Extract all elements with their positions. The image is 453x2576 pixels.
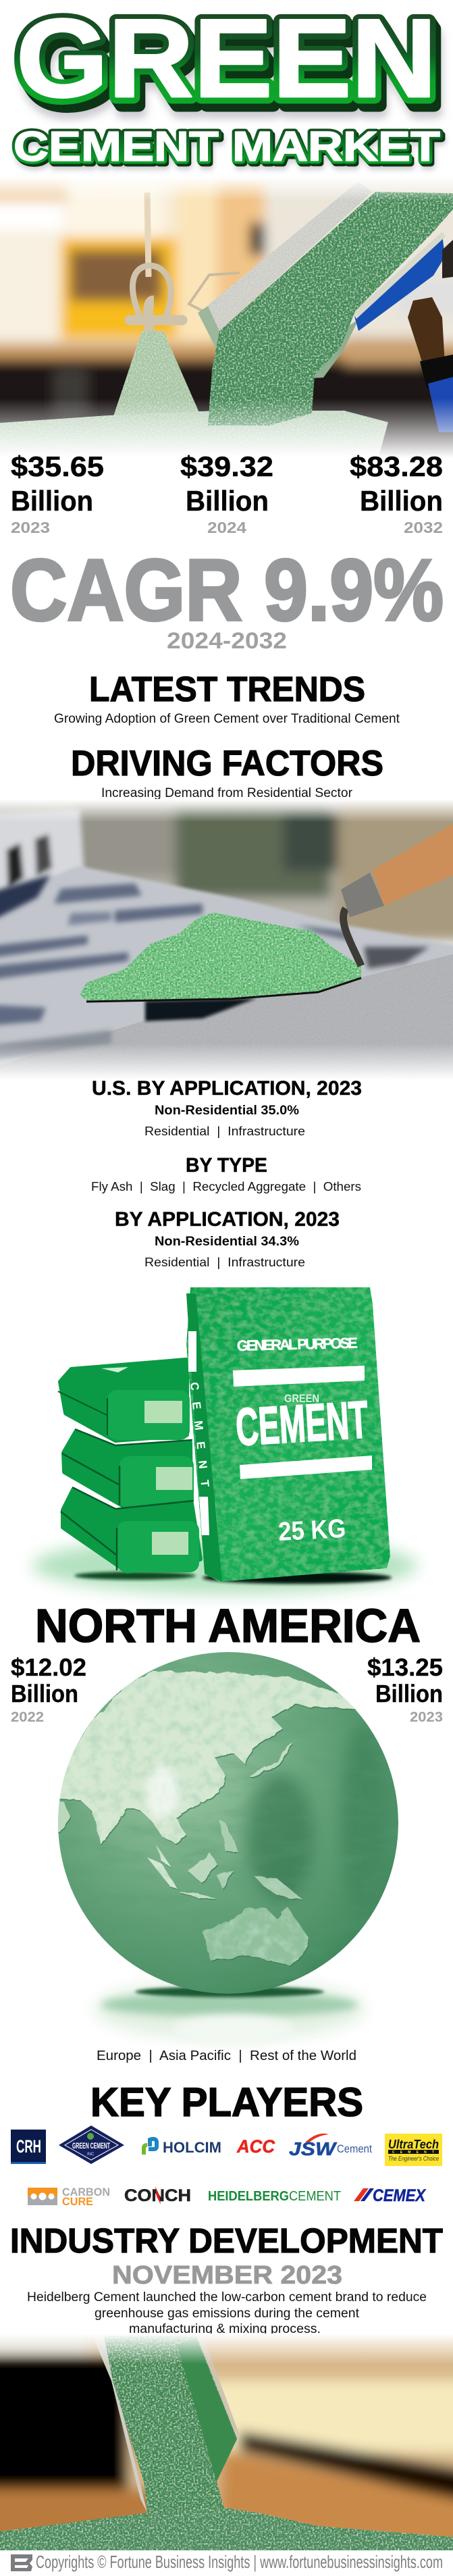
concrete bowl rim [0, 411, 388, 459]
title line: CEMENT MARKET: CEMENT MARKET [14, 124, 440, 170]
segment: U.S. by application: U.S. BY APPLICATION, 2023 [92, 1077, 362, 1100]
left concrete block [0, 808, 86, 892]
stacked bag: bottom [61, 1487, 200, 1572]
top white fade [0, 2334, 453, 2364]
logo: Green Cement Inc: INC [87, 2153, 95, 2157]
logo: Green Cement Inc [59, 2126, 124, 2164]
stat 2023: Billion [11, 485, 93, 517]
latest trends text: Growing Adoption of Green Cement over Traditional Cement [54, 712, 400, 726]
stat 2023: 2023 [11, 519, 50, 536]
stacked bag: top [58, 1360, 190, 1440]
tall bag label: 25 KG [277, 1514, 346, 1547]
stat 2032: 2032 [404, 519, 443, 536]
stat 2024 [180, 450, 273, 536]
driving factors text: Increasing Demand from Residential Sector [101, 786, 353, 800]
logo: Cemex [354, 2186, 426, 2205]
segment: U.S. by application [92, 1077, 362, 1138]
ground shadow [32, 1537, 417, 1594]
stacked bag: middle [62, 1429, 194, 1509]
logo: UltraTech: UltraTech [388, 2138, 439, 2151]
icon: Fortune Business Insights logo [11, 2554, 32, 2571]
key players heading: KEY PLAYERS [90, 2080, 363, 2125]
blurred yellow machine background [0, 178, 453, 456]
segment: by type: BY TYPE [186, 1154, 267, 1177]
stat 2023: $35.65 [11, 450, 104, 482]
segment: U.S. by application: Non-Residential 35.0% [155, 1104, 299, 1118]
north america 2022 value: $12.02 [11, 1653, 86, 1681]
shadow under trowel [145, 998, 257, 1021]
stat 2024: Billion [186, 485, 269, 517]
segment: by application [115, 1208, 340, 1269]
north america 2023 value: $13.25 [367, 1653, 443, 1681]
stat 2032 [350, 450, 443, 536]
mid photo: green cement on trowel over concrete block [0, 787, 453, 1087]
logo: JSW Cement [289, 2134, 372, 2159]
development description: greenhouse gas emissions during the cement [95, 2307, 360, 2321]
chute end plates [198, 306, 219, 350]
logo: Conch: CONCH [124, 2186, 191, 2205]
logo: CarbonCure: CARBON [62, 2186, 110, 2198]
tall bag label [233, 1335, 372, 1547]
chute white rim [208, 182, 373, 331]
logo: ACC: ACC [236, 2136, 275, 2157]
white fade edges [0, 799, 453, 822]
CAGR period: 2024-2032 [167, 628, 287, 654]
tall bag side strip [186, 1293, 222, 1582]
trowel [86, 824, 453, 1002]
title line: GREEN: GREEN [16, 0, 437, 121]
logo: CRH [11, 2130, 46, 2164]
north america 2022 value: 2022 [11, 1709, 44, 1725]
continents [54, 1672, 358, 1966]
globe sphere [54, 1652, 400, 1994]
logo: HeidelbergCement [208, 2189, 341, 2204]
illustration: green cement bags [32, 1287, 417, 1594]
segment: by type [91, 1154, 361, 1193]
footer copyright [11, 2552, 443, 2572]
logo: JSW Cement: Cement [337, 2142, 372, 2155]
segment: by application: BY APPLICATION, 2023 [115, 1208, 340, 1231]
logo row one [11, 2126, 442, 2166]
north america 2023 value: 2023 [410, 1709, 443, 1725]
other regions: Europe | Asia Pacific | Rest of the World [97, 2049, 356, 2063]
hero photo: green cement pouring down a chute [0, 178, 453, 456]
tall bag label: GREEN [284, 1392, 319, 1405]
stat 2032: Billion [360, 485, 443, 517]
north america 2023 value [367, 1653, 443, 1725]
green cement pile [80, 912, 361, 1001]
north america 2022 value: Billion [11, 1680, 78, 1707]
blue chute side [354, 234, 445, 331]
logo row two [28, 2186, 426, 2208]
hand [408, 240, 453, 432]
title line: CEMENT MARKET: CEMENT MARKET [14, 124, 440, 170]
development description [27, 2290, 427, 2336]
globe shadow and reflection [95, 1979, 365, 2040]
north america heading: NORTH AMERICA [35, 1599, 421, 1652]
green chute stream [104, 2336, 237, 2513]
driving factors heading: DRIVING FACTORS [71, 744, 383, 783]
market stats [11, 450, 443, 536]
illustration: green cement bags: CEMENT [188, 1381, 211, 1488]
chute rim [92, 2336, 147, 2513]
chute handle [189, 273, 240, 316]
logo: UltraTech [385, 2134, 442, 2166]
bottom photo: green cement poured at a site [0, 2323, 453, 2564]
logo: Green Cement Inc: GREEN CEMENT [72, 2141, 110, 2150]
blurred background [0, 787, 453, 942]
shackle [130, 265, 182, 334]
logo: UltraTech: The Engineer's Choice [388, 2155, 439, 2162]
logo: JSW Cement: JSW [289, 2138, 338, 2159]
stat 2032: $83.28 [350, 450, 443, 482]
globe illustration [54, 1652, 400, 2044]
cement pile [0, 2508, 453, 2550]
logo: HeidelbergCement: HEIDELBERG [208, 2189, 289, 2204]
green cement stream [208, 192, 453, 426]
concrete block [0, 866, 453, 1065]
logo: UltraTech: CEMENT [392, 2150, 434, 2155]
north america 2023 value: Billion [375, 1680, 443, 1707]
segment: U.S. by application: Residential | Infrastructure [144, 1125, 305, 1138]
segment: by application: Non-Residential 34.3% [155, 1235, 299, 1249]
development description: Heidelberg Cement launched the low-carbon cement brand to reduce [27, 2290, 427, 2304]
stat 2023 [11, 450, 104, 536]
latest trends heading: LATEST TRENDS [89, 670, 365, 709]
date: November 2023: NOVEMBER 2023 [112, 2261, 342, 2290]
white fade edges [0, 176, 453, 201]
tall bag label: CEMENT [234, 1389, 370, 1457]
development description: manufacturing & mixing process. [129, 2322, 321, 2336]
logo: HeidelbergCement: CEMENT [289, 2189, 341, 2204]
blurred site background [0, 2335, 453, 2537]
stat 2024: $39.32 [180, 450, 273, 482]
logo: CarbonCure: CURE [62, 2195, 93, 2208]
stat 2024: 2024 [207, 519, 246, 536]
title: Green Cement Market [14, 0, 440, 170]
segment: by application: Residential | Infrastructure [144, 1256, 305, 1269]
tall bag label: GENERAL PURPOSE [237, 1335, 358, 1354]
logo: CRH: CRH [16, 2136, 41, 2157]
north america 2022 value [11, 1653, 86, 1725]
industry development heading: INDUSTRY DEVELOPMENT [10, 2221, 443, 2260]
logo: Holcim: HOLCIM [163, 2139, 221, 2156]
tall standing bag [186, 1287, 390, 1582]
segment: by type: Fly Ash | Slag | Recycled Aggregate | Others [91, 1180, 361, 1193]
cement-coated hook mound [113, 331, 198, 415]
logo: CarbonCure [28, 2186, 110, 2208]
logo: Cemex: CEMEX [373, 2186, 426, 2205]
concrete block holes [0, 875, 429, 1060]
rope [147, 192, 149, 277]
